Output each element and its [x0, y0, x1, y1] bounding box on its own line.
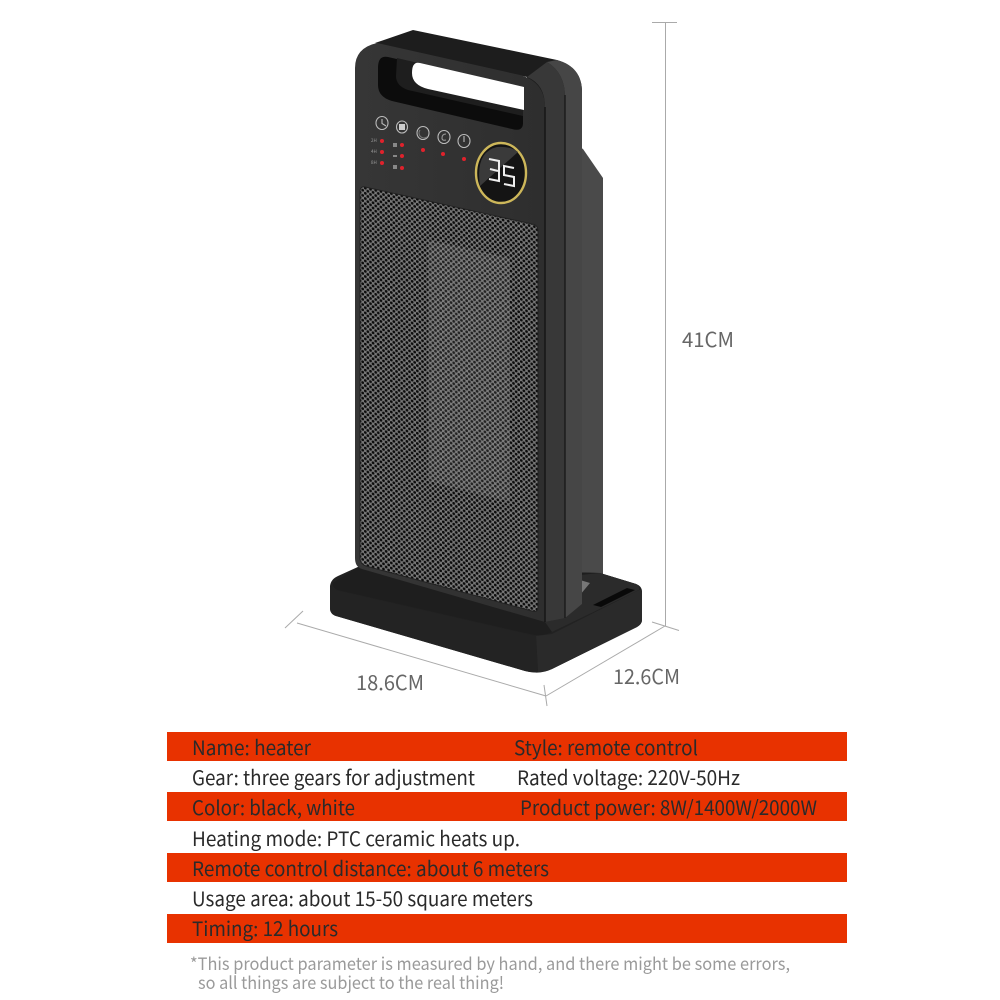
digital display dial: [476, 143, 526, 203]
row texts: Rated voltage: 220V-50Hz: [517, 762, 740, 791]
row texts: Remote control distance: about 6 meters: [192, 853, 549, 882]
timer labels: 8H: [371, 160, 377, 166]
spec table: [167, 732, 847, 943]
row texts: Style: remote control: [514, 732, 698, 761]
timer labels: 4H: [371, 149, 377, 155]
row texts: Timing: 12 hours: [192, 913, 338, 942]
row texts: Product power: 8W/1400W/2000W: [520, 792, 817, 821]
width dimension line: [285, 611, 665, 706]
label: height 41CM: 41CM: [682, 323, 734, 353]
handle opening: [378, 57, 524, 130]
heater product illustration: [330, 30, 642, 673]
row texts: Name: heater: [192, 732, 311, 761]
rear vent housing: [578, 146, 603, 590]
mode glyphs: [393, 143, 397, 169]
footnote: so all things are subject to the real thing!: [198, 969, 504, 994]
timer labels: 2H: [371, 138, 377, 144]
body front face: [355, 43, 545, 622]
footnote: *This product parameter is measured by hand, and there might be some errors,: [190, 950, 790, 975]
label: depth 12.6CM: 12.6CM: [613, 660, 680, 690]
red rows: [167, 732, 847, 943]
height dimension line: [652, 22, 679, 630]
base stand: [330, 566, 642, 673]
label: width 18.6CM: 18.6CM: [356, 666, 424, 696]
control icons: [376, 116, 470, 148]
body side shell: [375, 30, 582, 622]
timer labels: [371, 138, 377, 166]
row texts: Gear: three gears for adjustment: [192, 762, 475, 791]
row texts: Heating mode: PTC ceramic heats up.: [192, 823, 520, 852]
row texts: [192, 732, 817, 942]
mesh grille: [360, 187, 538, 612]
row texts: Color: black, white: [192, 792, 355, 821]
indicator lights: [380, 139, 466, 170]
row texts: Usage area: about 15-50 square meters: [192, 883, 533, 912]
footnote: [190, 950, 790, 994]
